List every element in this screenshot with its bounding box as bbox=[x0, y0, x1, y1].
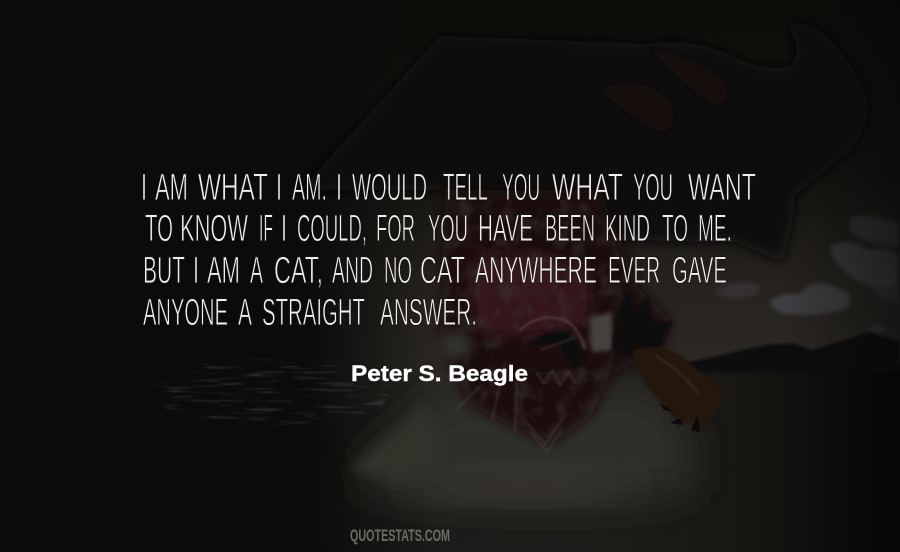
clouds bbox=[715, 216, 898, 333]
dragon wing silhouette bbox=[300, 23, 869, 262]
quote line 3: A bbox=[250, 250, 263, 292]
quote line 3: CAT bbox=[420, 250, 465, 292]
shoulder arc bbox=[520, 318, 585, 350]
quote line 2: COULD, bbox=[297, 208, 367, 250]
quote line 3: EVER bbox=[608, 250, 660, 292]
quote line 1: I bbox=[336, 167, 342, 209]
creature bbox=[439, 190, 722, 452]
quote line 1: AM bbox=[155, 167, 188, 209]
quote line 2: I bbox=[281, 208, 287, 250]
quote line 1: YOU bbox=[633, 167, 673, 209]
quote line 3: ANYWHERE bbox=[475, 250, 597, 292]
left gray blob bbox=[439, 331, 471, 359]
quote line 2: YOU bbox=[428, 208, 468, 250]
quote line 3: GAVE bbox=[672, 250, 727, 292]
creature dark silhouette bbox=[440, 190, 672, 445]
dust mist bbox=[350, 382, 695, 502]
quote line 1 bbox=[141, 167, 756, 209]
claws bbox=[660, 403, 700, 432]
quote line 2: TO bbox=[145, 208, 173, 250]
quote text bbox=[141, 167, 756, 334]
quote line 1: WANT bbox=[688, 167, 756, 209]
quote line 3: I bbox=[193, 250, 199, 292]
quote line 3 bbox=[143, 250, 727, 292]
quote line 2: KIND bbox=[605, 208, 650, 250]
quote line 2: ME. bbox=[698, 208, 732, 250]
quote line 1: I bbox=[141, 167, 147, 209]
quote line 4: STRAIGHT bbox=[262, 292, 365, 334]
author name: Peter S. Beagle bbox=[351, 361, 528, 386]
right edge shade bbox=[780, 0, 900, 552]
quote line 3: NO bbox=[384, 250, 412, 292]
belt bbox=[490, 345, 575, 370]
quote line 2: IF bbox=[259, 208, 273, 250]
quote line 1: I bbox=[276, 167, 282, 209]
quote line 2 bbox=[145, 208, 732, 250]
distant mountains bbox=[690, 332, 900, 372]
dust cloud main bbox=[360, 382, 695, 502]
rock streaks bbox=[150, 358, 390, 426]
quote line 2: FOR bbox=[376, 208, 415, 250]
quote line 1: YOU bbox=[502, 167, 540, 209]
dust left tongue bbox=[350, 402, 440, 482]
chest glow bbox=[470, 253, 590, 336]
quote line 3: AM bbox=[207, 250, 240, 292]
quote line 4: ANYONE bbox=[143, 292, 228, 334]
quote line 2: KNOW bbox=[180, 208, 248, 250]
quote line 1: WOULD bbox=[352, 167, 427, 209]
quote line 2: TO bbox=[662, 208, 688, 250]
quote line 4: ANSWER. bbox=[380, 292, 477, 334]
quote line 2: BEEN bbox=[545, 208, 595, 250]
dust cloud bright band bbox=[400, 473, 640, 497]
dark dome bbox=[530, 331, 585, 372]
spikes bbox=[612, 290, 672, 358]
armour lines bbox=[455, 338, 700, 452]
water bbox=[590, 362, 900, 552]
armour texture bbox=[445, 200, 635, 440]
site watermark: QUOTESTATS.COM bbox=[350, 526, 450, 545]
quote line 2: HAVE bbox=[478, 208, 533, 250]
quote line 3: AND bbox=[332, 250, 373, 292]
quote line 4: A bbox=[238, 292, 252, 334]
pale gap bbox=[590, 312, 612, 352]
arm bbox=[632, 347, 722, 432]
quote line 1: AM. bbox=[292, 167, 327, 209]
quote line 3: CAT, bbox=[274, 250, 323, 292]
quote line 4 bbox=[143, 292, 477, 334]
quote line 3: BUT bbox=[143, 250, 185, 292]
wing membranes bbox=[650, 48, 727, 106]
quote line 1: TELL bbox=[443, 167, 488, 209]
quote line 1: WHAT bbox=[198, 167, 268, 209]
quote line 1: WHAT bbox=[552, 167, 623, 209]
left darkness bbox=[0, 0, 440, 552]
